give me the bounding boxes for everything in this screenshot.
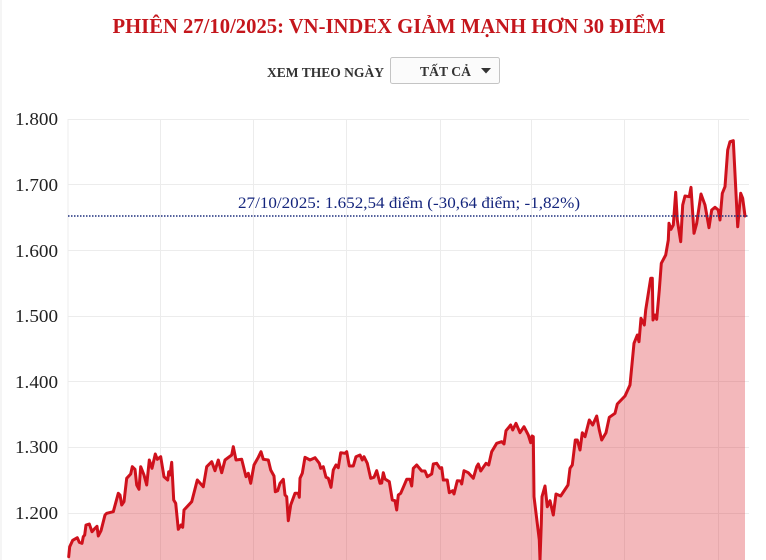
y axis labels: 1.600 bbox=[15, 241, 58, 261]
icon: dropdown arrow bbox=[481, 68, 491, 74]
dropdown value: TẤT CẢ bbox=[420, 63, 472, 80]
date filter bbox=[267, 58, 500, 84]
reference line annotation: 27/10/2025: 1.652,54 điểm (-30,64 điểm; -1,82%) bbox=[238, 195, 580, 212]
y axis labels: 1.500 bbox=[15, 306, 58, 326]
y axis labels: 1.300 bbox=[15, 437, 58, 457]
reference line at 1.652,54 bbox=[68, 215, 749, 217]
y axis labels: 1.400 bbox=[15, 372, 58, 392]
title: PHIÊN 27/10/2025: VN-INDEX GIẢM MẠNH HƠN 30 ĐIỂM bbox=[112, 14, 666, 38]
y axis labels: 1.700 bbox=[15, 175, 58, 195]
y axis labels bbox=[15, 109, 58, 523]
VN-Index line bbox=[69, 141, 745, 560]
area under VN-Index line bbox=[69, 141, 745, 560]
dropdown box bbox=[390, 58, 500, 84]
y axis labels: 1.200 bbox=[15, 503, 58, 523]
filter label: XEM THEO NGÀY bbox=[267, 64, 384, 81]
y axis labels: 1.800 bbox=[15, 109, 58, 129]
